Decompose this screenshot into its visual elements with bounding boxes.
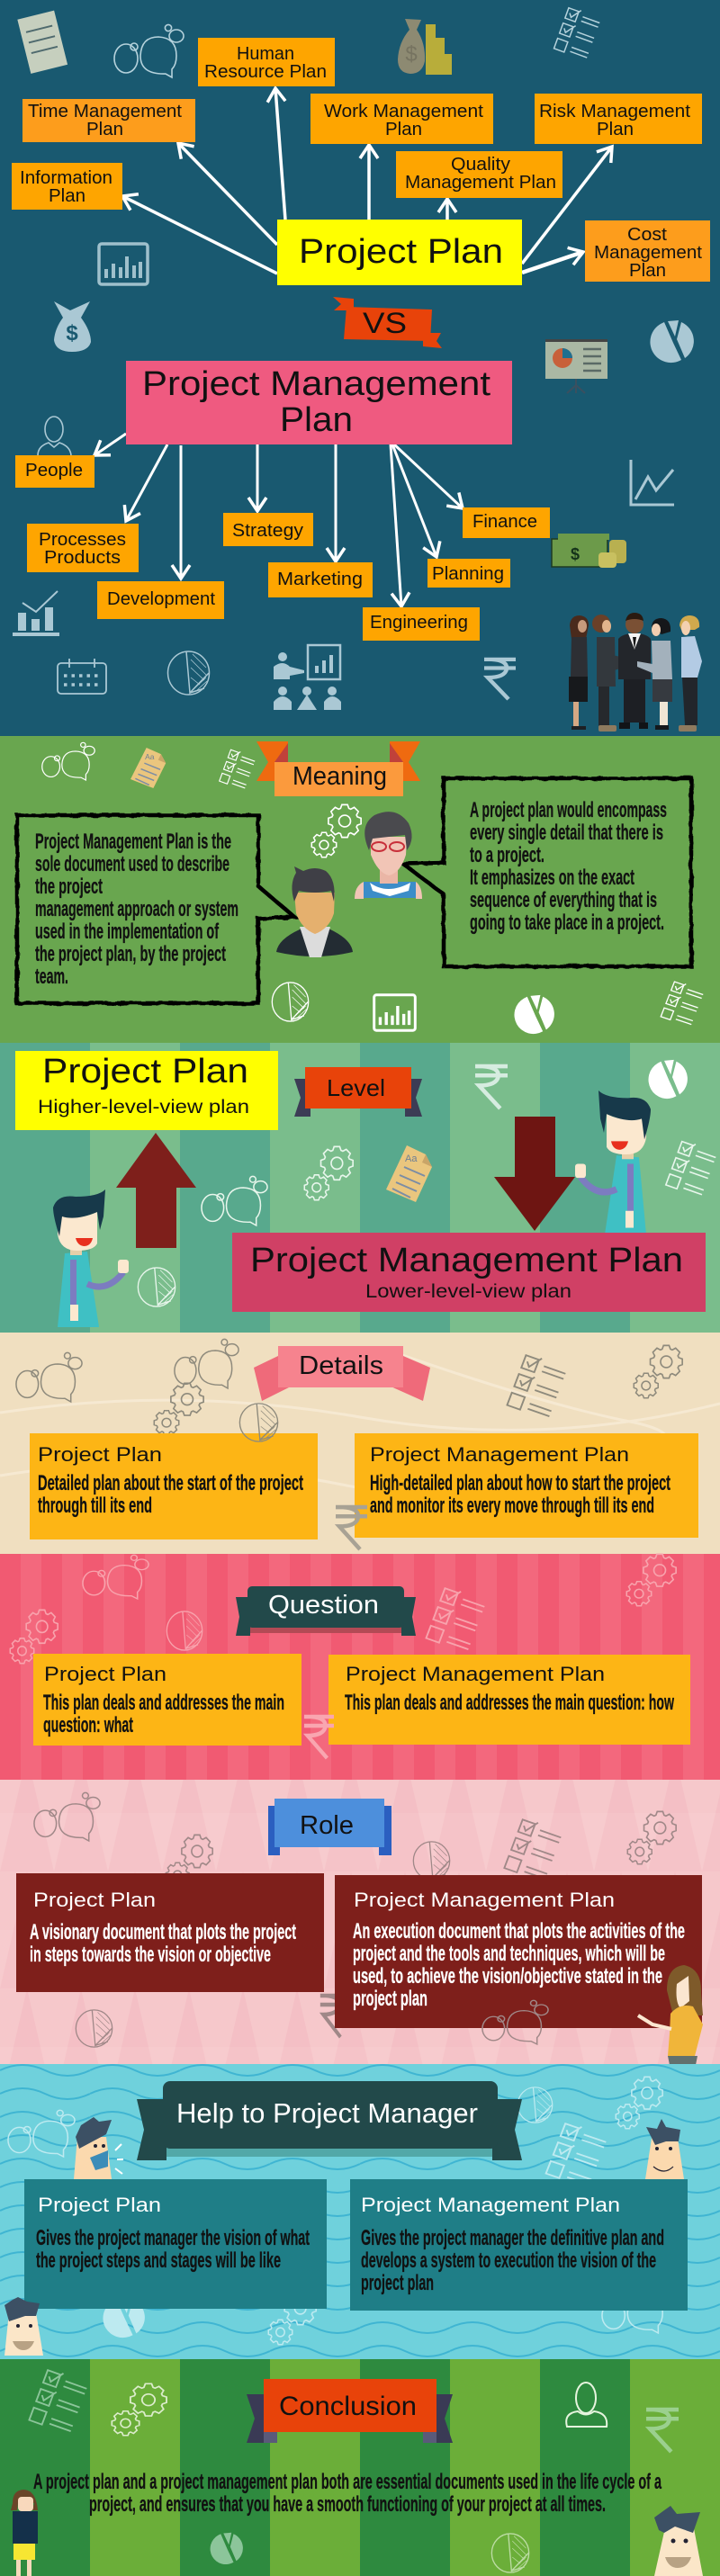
box: project plan higher level: Higher-level-view plan (38, 1097, 249, 1117)
icon: presentation board (545, 339, 608, 393)
label: work management plan: Work Management (324, 102, 483, 121)
card: project plan question (33, 1654, 302, 1746)
speech box: project management plan meaning: used in the implementation of (35, 920, 220, 944)
icon: speech bubbles (16, 1352, 82, 1402)
label: quality management plan: Quality (451, 155, 510, 175)
icon: growth chart (631, 460, 674, 505)
ribbon: details: Details (299, 1351, 383, 1380)
speech box: project management plan meaning: management approach or system (35, 897, 238, 921)
label: engineering: Engineering (370, 613, 468, 633)
label: project management plan: Plan (280, 401, 353, 439)
ribbon: meaning: Meaning (292, 762, 387, 791)
arrow to work management plan (367, 145, 371, 220)
speech box: project management plan meaning: the project plan, by the project (35, 942, 226, 966)
icon: cash and coins: $ (571, 545, 580, 563)
speech box: project plan meaning (403, 778, 691, 966)
label: human resource plan: Resource Plan (204, 62, 327, 82)
icon: speech bubbles (114, 24, 184, 77)
panel: role (0, 1780, 720, 2065)
icon: hatched pie (166, 1611, 202, 1650)
card: project plan help: the project steps and stages will be like (36, 2248, 281, 2273)
card: project plan help (24, 2179, 327, 2309)
panel: help to project manager (0, 2064, 720, 2359)
ribbon: role (268, 1799, 392, 1855)
icon: hatched pie (138, 1268, 176, 1306)
icon: gears (166, 1835, 212, 1888)
icon: gears (311, 804, 361, 857)
card: project management plan help: Project Management Plan (361, 2194, 620, 2216)
icon: pie chart (514, 995, 554, 1034)
label: project plan: Project Plan (299, 233, 503, 271)
label: time management plan (22, 99, 195, 142)
character: smiling man (645, 2119, 684, 2179)
icon: hatched pie (518, 2087, 553, 2123)
icon: document (386, 1145, 432, 1202)
label: strategy: Strategy (232, 521, 303, 541)
label: finance (463, 507, 550, 538)
illustration: woman avatar (355, 812, 422, 899)
icon: presenter (274, 645, 341, 710)
label: project management plan: Project Management (142, 365, 490, 403)
character: girl with microphone (11, 2490, 38, 2576)
icon: gears (10, 1610, 58, 1664)
speech box: project management plan meaning: the project (35, 875, 103, 899)
label: risk management plan: Plan (597, 120, 634, 139)
label: risk management plan: Risk Management (539, 102, 690, 121)
character: bottom-right man (654, 2506, 703, 2576)
character: presenting woman (638, 1965, 703, 2065)
ribbon: conclusion: Conclusion (279, 2392, 417, 2421)
icon: rupee (646, 2410, 679, 2452)
icon: speech bubbles (83, 1555, 148, 1599)
label: work management plan: Plan (385, 120, 422, 139)
box: project plan higher level: Project Plan (42, 1053, 248, 1091)
card: project plan role: A visionary document that plots the project (30, 1920, 296, 1944)
label: processes products: Products (44, 548, 121, 568)
label: planning: Planning (432, 564, 504, 584)
icon: hatched pie (413, 1842, 450, 1880)
label: time management plan: Plan (86, 120, 123, 139)
panel: question (0, 1554, 720, 1780)
label: information plan: Information (20, 168, 112, 188)
icon: checklist (554, 6, 601, 60)
ribbon: vs (333, 297, 442, 348)
label: information plan: Plan (49, 186, 86, 206)
ribbon: question (236, 1586, 416, 1636)
icon: dollar bag (54, 301, 91, 352)
label: information plan (12, 163, 122, 210)
icon: speech bubbles (482, 2000, 548, 2044)
icon: cash and coins (552, 534, 626, 568)
icon: gears (634, 1345, 682, 1398)
label: human resource plan: Human (237, 44, 294, 64)
icon: gears (626, 1554, 676, 1606)
ribbon: level (294, 1067, 422, 1117)
icon: checklist (666, 1140, 718, 1198)
icon: speech bubbles (42, 742, 94, 780)
arrow to time management plan (178, 143, 277, 245)
card: project management plan role: project plan (353, 1987, 428, 2011)
icon: dollar bag: $ (66, 321, 78, 346)
icon: speech bubbles (202, 1176, 267, 1225)
icon: gears (268, 2292, 316, 2345)
card: project management plan question (328, 1655, 690, 1745)
card: project plan role: Project Plan (33, 1889, 156, 1911)
icon: speech bubbles (602, 2284, 670, 2333)
icon: checklist (426, 1586, 487, 1653)
icon: rupee (320, 1996, 346, 2037)
icon: checklist (507, 1353, 568, 1420)
card: project plan role: in steps towards the vision or objective (30, 1943, 271, 1967)
icon: checklist (546, 2122, 608, 2188)
label: marketing (268, 562, 373, 597)
icon: hatched pie (272, 983, 309, 1021)
label: cost management plan: Cost (627, 225, 667, 245)
box: project management plan lower level (232, 1233, 706, 1312)
decorative wood grain (0, 1350, 720, 1498)
label: time management plan: Time Management (28, 102, 182, 121)
box: project plan higher level (15, 1051, 278, 1130)
character: shouting man (74, 2117, 123, 2179)
arrow to quality management plan (446, 199, 449, 220)
ribbon: details (254, 1346, 430, 1401)
icon: checklist (220, 749, 256, 790)
arrow to engineering (391, 444, 401, 606)
card: project plan detail: Project Plan (38, 1443, 162, 1466)
label: processes products (27, 524, 139, 572)
arrow to risk management plan (522, 147, 612, 264)
card: project management plan question: Project Management Plan (346, 1663, 605, 1685)
panel: meaning (0, 736, 720, 1043)
icon: bar chart tablet (374, 995, 415, 1030)
icon: gears (154, 1383, 203, 1435)
illustration: business team (569, 613, 702, 732)
icon: checklist (661, 980, 705, 1027)
speech box: project management plan meaning: sole document used to describe (35, 852, 230, 876)
label: processes products: Processes (39, 530, 126, 550)
box: project management plan lower level: Project Management Plan (250, 1242, 683, 1279)
card: project management plan detail (355, 1433, 698, 1538)
speech box: project management plan meaning (17, 815, 294, 1003)
ribbon: help to project manager (137, 2081, 522, 2160)
ribbon: meaning (256, 741, 420, 796)
card: project plan detail: through till its end (38, 1494, 152, 1518)
arrow to information plan (122, 196, 277, 274)
label: marketing: Marketing (277, 570, 363, 589)
card: project plan question: Project Plan (44, 1663, 166, 1685)
ribbon: help to project manager: Help to Project Manager (176, 2097, 478, 2129)
icon: bar chart tablet (99, 244, 148, 284)
arrow to processes products (126, 444, 167, 521)
card: project management plan role: Project Management Plan (354, 1889, 615, 1911)
arrow to people (94, 434, 126, 455)
icon: money bag and coins: $ (405, 42, 418, 67)
conclusion text (33, 2470, 662, 2517)
card: project plan question: question: what (43, 1713, 133, 1737)
label: quality management plan: Management Plan (405, 173, 556, 193)
label: cost management plan: Management (594, 243, 702, 263)
icon: document (130, 748, 166, 788)
arrow to finance (394, 444, 463, 508)
character: right man (575, 1091, 651, 1234)
speech box: project management plan meaning: team. (35, 965, 68, 989)
ribbon: conclusion (247, 2379, 453, 2443)
icon: pie chart (650, 320, 694, 363)
icon: hatched pie (239, 1404, 278, 1441)
panel: conclusion (0, 2359, 720, 2576)
arrow to human resource plan (275, 88, 285, 220)
label: cost management plan (585, 220, 710, 282)
speech box: project management plan meaning: Project Management Plan is the (35, 830, 231, 854)
icon: rupee (336, 1507, 367, 1549)
card: project plan help: Gives the project manager the vision of what (36, 2226, 310, 2250)
arrow to development (180, 445, 182, 579)
icon: checklist (504, 1818, 563, 1882)
arrow to strategy (256, 444, 259, 511)
label: human resource plan (198, 38, 335, 86)
label: finance: Finance (472, 512, 537, 532)
card: project plan detail: Detailed plan about the start of the project (38, 1471, 303, 1495)
card: project management plan help (350, 2179, 688, 2311)
icon: hatched pie (167, 651, 209, 695)
icon: speech bubbles (34, 1792, 100, 1841)
card: project plan question: This plan deals and addresses the main (43, 1691, 284, 1715)
speech box: project plan meaning: to a project. (470, 843, 544, 867)
label: people (15, 455, 94, 488)
ribbon: vs: VS (363, 307, 407, 339)
card: project plan detail (30, 1433, 318, 1539)
label: cost management plan: Plan (629, 261, 666, 281)
label: development (97, 581, 224, 619)
card: project management plan role (335, 1875, 702, 2028)
icon: pie chart (648, 1060, 688, 1099)
icon: gears (627, 1811, 676, 1864)
icon: rupee (304, 1717, 334, 1758)
box: project management plan lower level: Lower-level-view plan (365, 1281, 572, 1302)
panel: details (0, 1333, 720, 1554)
card: project plan help: Project Plan (38, 2194, 161, 2216)
arrow to cost management plan (522, 252, 583, 273)
panel: level (0, 1043, 720, 1333)
icon: hatched pie (491, 2534, 529, 2572)
arrow to marketing (335, 444, 337, 561)
label: strategy (223, 513, 313, 546)
icon: person outline (38, 417, 71, 455)
icon: hatched pie (76, 2010, 112, 2047)
arrow to planning (392, 444, 436, 557)
icon: pie chart (211, 2533, 243, 2564)
label: risk management plan (535, 94, 702, 144)
illustration: man avatar (276, 866, 353, 957)
icon: pie chart (103, 2298, 145, 2338)
icon: rupee (475, 1066, 508, 1108)
label: quality management plan (396, 151, 562, 198)
character: left man (53, 1189, 129, 1327)
ribbon: role: Role (300, 1811, 354, 1840)
icon: gears (112, 2383, 166, 2436)
icon: money bag and coins (398, 19, 452, 75)
icon: notepad (17, 11, 68, 74)
card: project management plan help: project plan (361, 2271, 434, 2295)
card: project plan role (16, 1873, 324, 1992)
icon: gears (304, 1146, 353, 1200)
ribbon: question: Question (268, 1591, 379, 1620)
icon: speech bubbles (175, 1339, 238, 1388)
icon: calendar (58, 659, 106, 694)
label: work management plan (310, 94, 493, 144)
icon: rupee (484, 660, 516, 699)
icon: bar chart with arrow (13, 591, 59, 636)
label: planning (428, 559, 510, 588)
label: development: Development (107, 589, 215, 609)
label: project management plan (126, 361, 512, 444)
character: bottom-left man (4, 2297, 43, 2356)
card: project management plan detail: Project Management Plan (370, 1443, 629, 1466)
arrow: up (116, 1133, 196, 1248)
arrow: down (494, 1117, 575, 1231)
icon: checklist (29, 2368, 89, 2435)
panel: project plan vs project management plan (0, 0, 720, 736)
label: project plan (277, 220, 522, 285)
icon: person outline (566, 2383, 607, 2427)
label: people: People (25, 461, 83, 480)
icon: gears (616, 2077, 662, 2129)
ribbon: level: Level (327, 1074, 385, 1101)
label: engineering (363, 607, 480, 641)
icon: speech bubbles (8, 2110, 75, 2157)
